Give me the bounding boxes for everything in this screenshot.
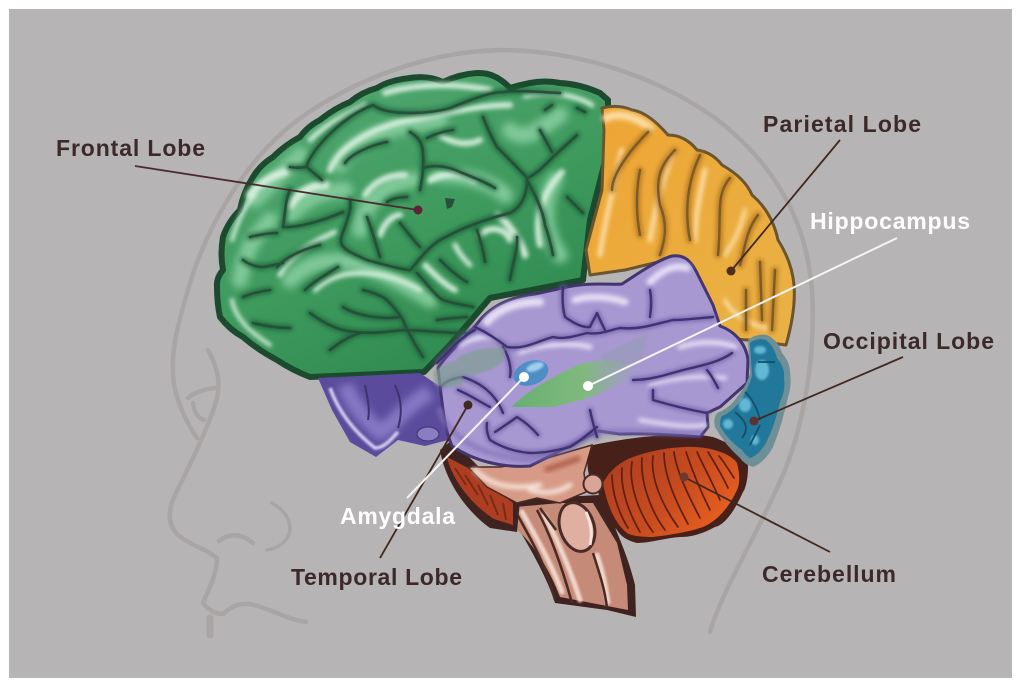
leader: hippocampus: [583, 238, 897, 391]
pons: [468, 445, 592, 503]
label: Frontal Lobe: Frontal Lobe: [56, 135, 205, 161]
label: Amygdala: Amygdala: [340, 503, 455, 529]
frontal lobe sulci: [243, 91, 585, 357]
cerebellum: [588, 435, 748, 543]
leader: cerebellum: [680, 472, 830, 552]
frontal lobe sulci shadow: [243, 91, 585, 357]
label: Temporal Lobe: Temporal Lobe: [291, 564, 462, 590]
hazy structure overlay: [433, 332, 650, 387]
label: Cerebellum: Cerebellum: [762, 561, 896, 587]
occipital lobe: [714, 335, 791, 467]
frontal lobe gyrus highlights: [232, 85, 592, 345]
left red strip (cerebellar edge): [440, 440, 520, 532]
temporal lobe sulci shadow: [437, 287, 732, 453]
head silhouette outline: [170, 50, 813, 635]
temporal lobe lobes shading: [440, 267, 735, 460]
label: Parietal Lobe: Parietal Lobe: [763, 111, 921, 137]
temporal lobe sulci: [437, 287, 732, 453]
leader: temporal lobe: [380, 400, 472, 558]
parietal lobe: [586, 106, 794, 345]
amygdala: [510, 356, 552, 390]
label: Hippocampus: Hippocampus: [810, 208, 970, 234]
leader: frontal lobe: [135, 166, 422, 214]
parietal lobe sulci: [612, 132, 775, 330]
brain stem: [500, 495, 636, 617]
parietal lobe sulci shadow: [612, 132, 775, 330]
hippocampus: [512, 361, 640, 407]
brainstem knob: [584, 474, 602, 494]
leader lines and dots: [135, 140, 903, 558]
dark temporal lobe lower section: [318, 373, 448, 457]
leader: occipital lobe: [750, 357, 903, 426]
label: Occipital Lobe: Occipital Lobe: [823, 328, 994, 354]
leader: amygdala: [407, 372, 529, 498]
temporal lobe: [437, 256, 748, 466]
frontal lobe: [217, 73, 608, 377]
leader: parietal lobe: [726, 140, 840, 276]
